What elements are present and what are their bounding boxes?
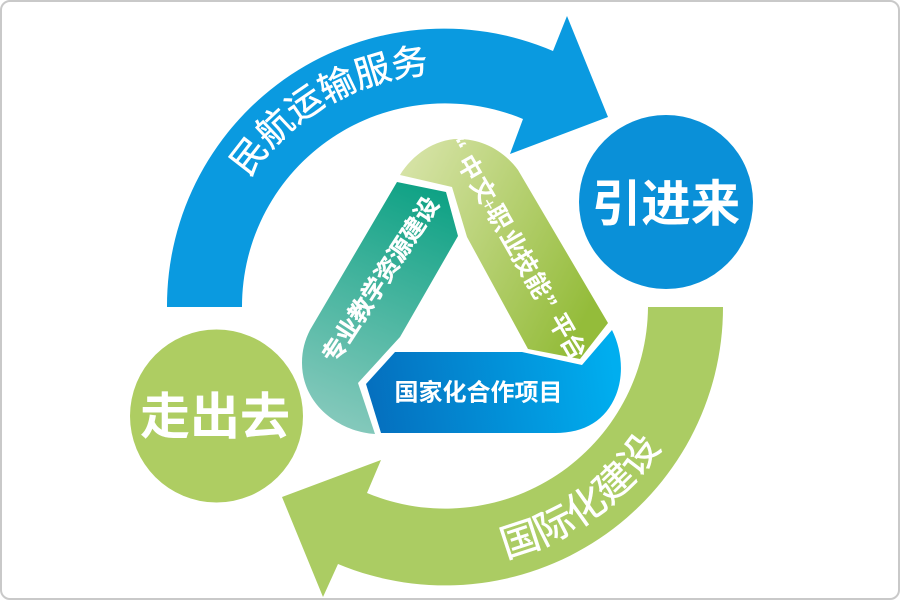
circle: 走出去: 走出去 xyxy=(140,389,290,445)
circle: 引进来 xyxy=(579,115,753,289)
arrow: blue arc 民航运输服务 xyxy=(167,16,608,307)
circle: 引进来: 引进来 xyxy=(592,177,740,232)
triangle segment: 国家化合作项目: 国家化合作项目 xyxy=(394,380,562,406)
circle: 走出去 xyxy=(130,330,303,502)
triangle segment: 中文+职业技能 平台: “中文+职业技能”平台 xyxy=(441,132,592,365)
arrow: green arc 国际化建设: 国际化建设 xyxy=(499,434,662,560)
triangle segment: 专业教学资源建设: 专业教学资源建设 xyxy=(318,192,445,368)
triangle segment: 国家化合作项目 xyxy=(366,330,621,433)
arrow: blue arc 民航运输服务: 民航运输服务 xyxy=(228,46,426,177)
arrow: green arc 国际化建设 xyxy=(282,307,723,597)
triangle segment: 专业教学资源建设 xyxy=(302,182,458,434)
